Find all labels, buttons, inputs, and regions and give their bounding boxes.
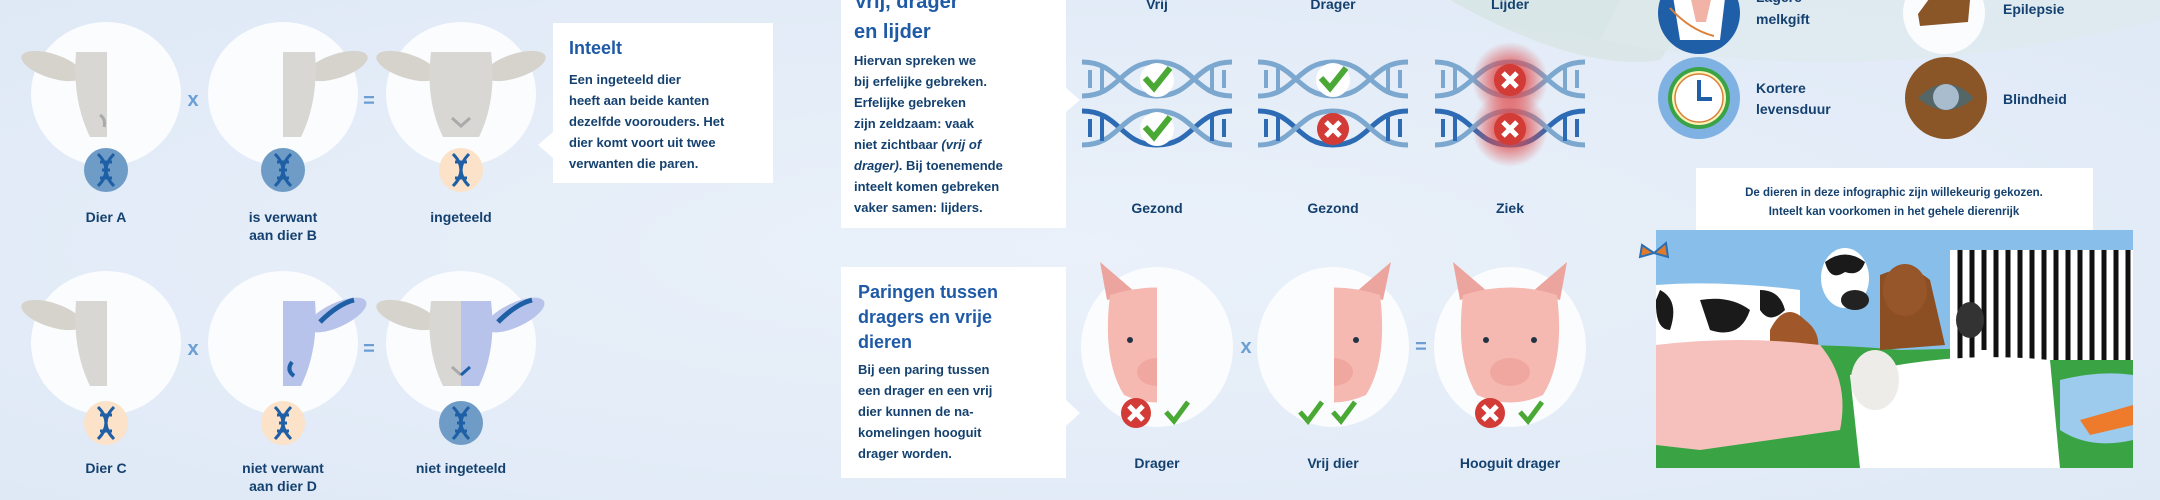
callout: Paringen tussen dragers en vrije dieren: drager worden. <box>858 446 952 461</box>
callout: Vrij, drager en lijder <box>841 0 1080 228</box>
text: Inteelt body: Een ingeteeld dier <box>569 72 681 87</box>
DNA Vrij top <box>1082 62 1232 96</box>
DNA Drager <box>1258 62 1408 96</box>
labels: Gezond Gezond Ziek: Gezond <box>1131 200 1183 216</box>
labels: pig outcomes: Drager <box>1134 455 1180 471</box>
callout: disclaimer <box>1696 168 2093 245</box>
symbol: x: x <box>187 338 199 360</box>
text: body: Erfelijke gebreken <box>854 95 966 110</box>
illustration: animal scene <box>1656 230 2133 468</box>
zebra <box>1950 250 2133 360</box>
icon: DNA badge niet ingeteeld <box>439 401 483 445</box>
label: ingeteeld: ingeteeld <box>430 209 492 225</box>
text: body: niet zichtbaar (vrij of <box>854 137 981 152</box>
text: Inteelt body: dier komt voort uit twee <box>569 135 716 150</box>
callout: Paringen tussen dragers en vrije dieren: Bij een paring tussen <box>858 362 990 377</box>
labels: Gezond Gezond Ziek: Gezond <box>1307 200 1359 216</box>
labels: Gezond Gezond Ziek <box>1131 200 1524 216</box>
label: Dier A: Dier A <box>86 209 126 225</box>
panel: sheep row 2 <box>18 271 549 494</box>
label: niet ingeteeld: niet ingeteeld <box>416 460 506 476</box>
cow <box>1656 283 1800 345</box>
chicken <box>1770 312 1818 345</box>
text: Epilepsie: Epilepsie <box>2003 1 2065 17</box>
icon: DNA badge C <box>84 401 128 445</box>
icon: DNA badge A <box>84 148 128 192</box>
panel: pigs <box>1081 262 1586 471</box>
icon: eye blindheid <box>1905 57 1987 139</box>
circle: niet ingeteeld <box>373 271 549 415</box>
panel: effects legend <box>1658 0 2067 139</box>
DNA Lijder <box>1435 62 1585 96</box>
callout: Paringen tussen dragers en vrije dieren: Paringen tussen <box>858 282 998 302</box>
text: Blindheid: Blindheid <box>2003 91 2067 107</box>
callout: disclaimer: De dieren in deze infographic zijn willekeurig gekozen. <box>1745 187 2043 199</box>
icon: butterfly <box>1640 243 1668 257</box>
callout: Paringen tussen dragers en vrije dieren: dragers en vrije <box>858 307 992 327</box>
dog <box>1880 270 1945 350</box>
text: body: bij erfelijke gebreken. <box>854 74 987 89</box>
text: Kortere levensduur: levensduur <box>1756 101 1831 117</box>
panel: sheep row 1 <box>18 22 549 243</box>
text: Inteelt body: heeft aan beide kanten <box>569 93 709 108</box>
label: is verwant aan dier B: is verwant <box>249 209 318 225</box>
column headers <box>1146 0 1530 12</box>
icon: DNA badge ingeteeld <box>439 148 483 192</box>
heading: Inteelt: Inteelt <box>569 38 622 58</box>
chart: DNA status grid <box>1082 62 1585 145</box>
callout: disclaimer: Inteelt kan voorkomen in het gehele dierenrijk <box>1769 206 2020 218</box>
symbol: =: = <box>363 338 375 360</box>
text: body: drager) <box>854 158 899 173</box>
callout: Paringen tussen dragers en vrije dieren: een drager en een vrij <box>858 383 992 398</box>
text: body: zijn zeldzaam: vaak <box>854 116 975 131</box>
callout: Paringen tussen dragers en vrije dieren: komelingen hooguit <box>858 425 982 440</box>
icon: epilepsie <box>1903 0 1985 54</box>
text: body: vaker samen: lijders. <box>854 200 983 215</box>
icon: DNA badge B <box>261 148 305 192</box>
label: niet verwant aan dier D: niet verwant <box>242 460 324 476</box>
symbol: =: = <box>1415 336 1427 358</box>
pig <box>1656 340 1842 450</box>
pig: Drager <box>1081 262 1233 428</box>
icons: status marks <box>1140 42 1548 167</box>
callout: Paringen tussen dragers en vrije dieren <box>841 267 1080 478</box>
text: Lagere melkgift: melkgift <box>1756 11 1810 27</box>
label: is verwant aan dier B: aan dier B <box>249 227 317 243</box>
text: body: Hiervan spreken we <box>854 53 976 68</box>
circle: Dier D <box>208 271 371 415</box>
callout: Paringen tussen dragers en vrije dieren: dier kunnen de na- <box>858 404 974 419</box>
icon: clock <box>1658 57 1740 139</box>
text: Inteelt body: dezelfde voorouders. Het <box>569 114 725 129</box>
labels: pig outcomes: Vrij dier <box>1307 455 1359 471</box>
text: Kortere levensduur: Kortere <box>1756 80 1806 96</box>
circle: Dier C <box>18 271 181 415</box>
circle: Dier B <box>208 22 371 166</box>
symbol: x: x <box>187 89 199 111</box>
callout: Paringen tussen dragers en vrije dieren: dieren <box>858 332 912 352</box>
symbol: =: = <box>363 90 375 112</box>
icon: DNA badge D <box>261 401 305 445</box>
callout: Inteelt <box>538 23 773 183</box>
icon: lagere melkgift <box>1658 0 1740 54</box>
labels: pig outcomes: Hooguit drager <box>1460 455 1561 471</box>
labels: pig outcomes <box>1134 455 1561 471</box>
symbol: x: x <box>1240 336 1252 358</box>
pig: Vrij dier <box>1257 262 1409 427</box>
decorative pale blob top <box>1450 0 1700 62</box>
text: body: . Bij toenemende <box>899 158 1003 173</box>
label: niet verwant aan dier D: aan dier D <box>249 478 317 494</box>
sheep <box>1850 357 2060 468</box>
pig: Hooguit drager <box>1434 262 1586 428</box>
text: Inteelt body: verwanten die paren. <box>569 156 698 171</box>
label: Dier C: Dier C <box>85 460 127 476</box>
text: body: inteelt komen gebreken <box>854 179 999 194</box>
heading: en lijder <box>854 21 931 43</box>
circle: ingeteeld <box>373 22 549 166</box>
labels: Gezond Gezond Ziek: Ziek <box>1496 200 1524 216</box>
circle: Dier A <box>18 22 181 166</box>
